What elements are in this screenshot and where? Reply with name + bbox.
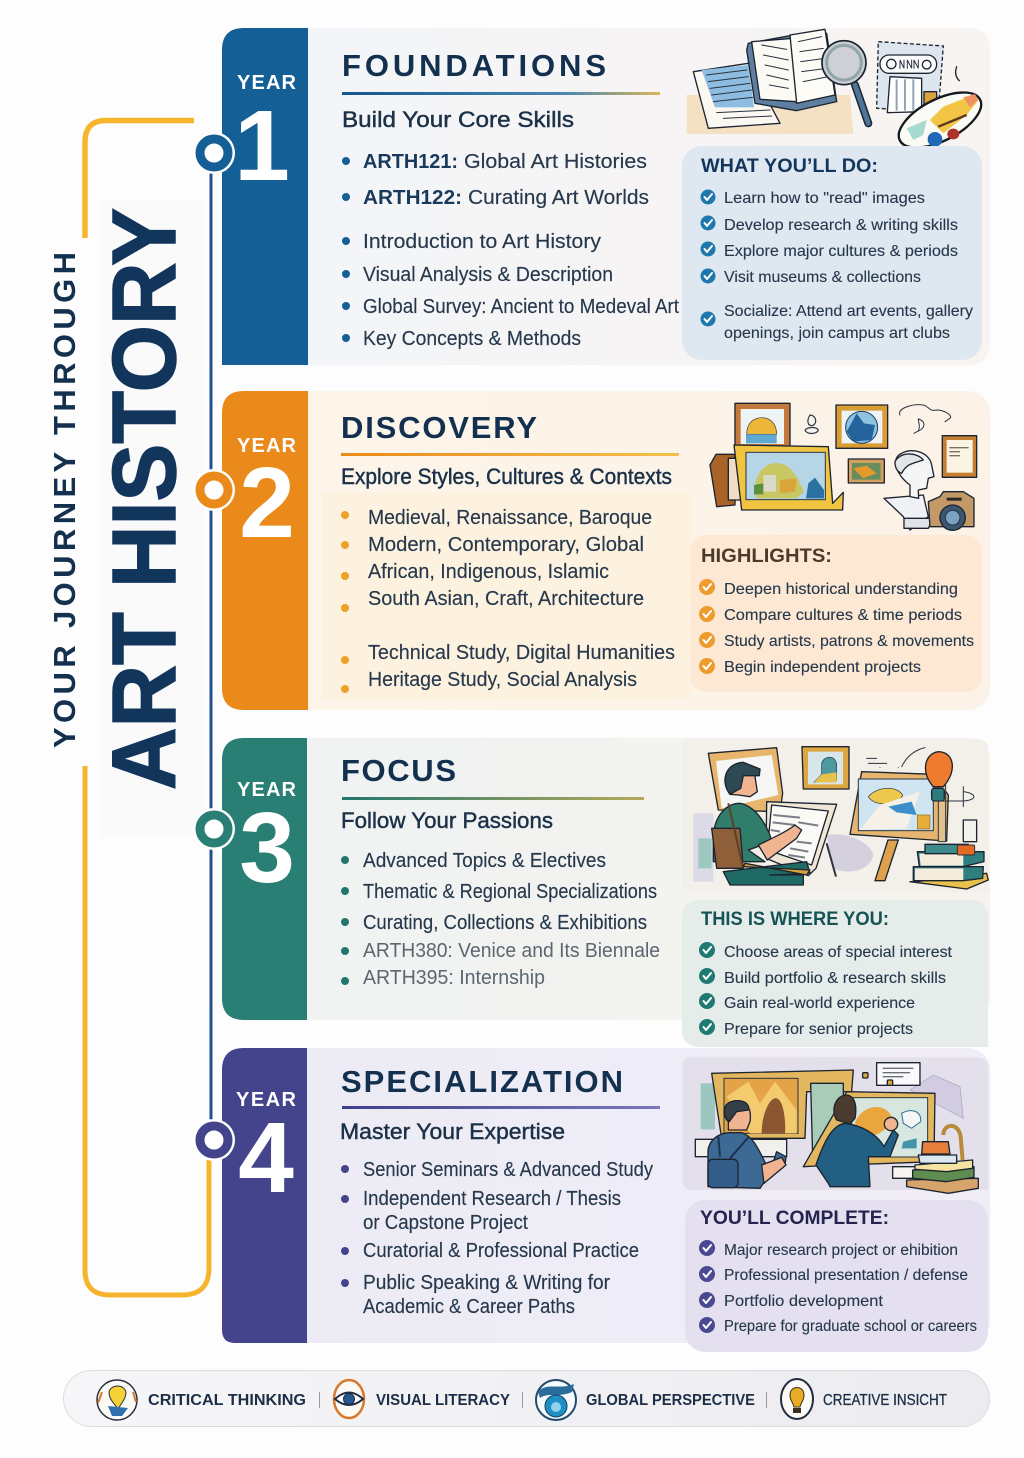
gold bracket top: [85, 120, 194, 238]
heading underline: [342, 797, 644, 800]
card: year 1 foundations: [222, 28, 990, 365]
panel: this is where you: Choose areas of special interest: [724, 944, 953, 961]
subheading: Master Your Expertise: [340, 1119, 565, 1144]
timeline node 1: [193, 132, 235, 174]
year label: YEAR: [237, 72, 297, 94]
topic list: or Capstone Project: [363, 1212, 528, 1234]
card background: [222, 1048, 990, 1343]
course list: [342, 151, 679, 350]
topic list: Academic & Career Paths: [363, 1296, 575, 1318]
heading: SPECIALIZATION: [341, 1064, 623, 1099]
panel: this is where you: Build portfolio & research skills: [724, 970, 946, 987]
heading: FOUNDATIONS: [342, 48, 606, 83]
footer bar: [64, 1370, 990, 1426]
topic list: Public Speaking & Writing for: [363, 1272, 610, 1294]
icon: creative insight: [781, 1379, 813, 1419]
topic list: ARTH395: Internship: [363, 967, 545, 989]
vertical title block: [47, 200, 205, 836]
timeline node 4: [193, 1119, 235, 1161]
year label: 2: [239, 447, 295, 559]
topic list: Independent Research / Thesis: [363, 1188, 621, 1210]
subheading: Follow Your Passions: [341, 808, 553, 833]
topic list: Curating, Collections & Exhibitions: [363, 912, 647, 934]
year label: 4: [238, 1102, 294, 1214]
panel: you'll complete: Major research project or ehibition: [724, 1242, 958, 1259]
card background: [222, 391, 990, 710]
panel: what you'll do: Develop research & writing skills: [724, 217, 958, 234]
card: year 3 focus: [222, 738, 990, 1047]
panel: highlights: HIGHLIGHTS:: [701, 546, 832, 567]
course list: Global Art Histories: [464, 151, 647, 173]
panel: what you'll do: Explore major cultures & periods: [724, 243, 958, 260]
course list: Introduction to Art History: [363, 231, 601, 253]
panel: what you'll do: Socialize: Attend art events, gallery: [724, 303, 973, 320]
panel: highlights: Begin independent projects: [724, 659, 921, 676]
panel: this is where you: Gain real-world experience: [724, 995, 915, 1012]
illustration: student sketching at easel: [682, 739, 988, 892]
panel: what you'll do: openings, join campus art clubs: [724, 325, 950, 342]
panel: what you'll do: [682, 146, 982, 360]
panel: this is where you: [682, 900, 988, 1047]
panel: topics: Medieval, Renaissance, Baroque: [368, 507, 652, 529]
topic list: Senior Seminars & Advanced Study: [363, 1159, 653, 1181]
title: art history: ART HISTORY: [95, 208, 195, 790]
label: global perspective: GLOBAL PERSPECTIVE: [586, 1392, 755, 1409]
panel: topics: [322, 492, 692, 700]
card: year 4 specialization: [222, 1048, 990, 1352]
panel: you'll complete: [685, 1200, 988, 1352]
heading: DISCOVERY: [341, 410, 537, 445]
panel: topics: Modern, Contemporary, Global: [368, 534, 644, 556]
panel: highlights: Deepen historical understanding: [724, 581, 958, 598]
gold bracket bottom: [85, 766, 209, 1295]
year band: [222, 1048, 307, 1343]
panel: you'll complete: Professional presentation / defense: [724, 1267, 968, 1284]
year label: YEAR: [236, 1089, 297, 1111]
year band: [222, 28, 308, 365]
panel: this is where you: Prepare for senior projects: [724, 1021, 913, 1038]
timeline line: [210, 172, 212, 1120]
illustration: students viewing artworks: [683, 1057, 988, 1193]
icon: visual literacy: [334, 1380, 364, 1418]
year label: 1: [234, 90, 290, 202]
subheading: Build Your Core Skills: [342, 107, 574, 132]
label: creative insight: CREATIVE INSICHT: [823, 1392, 947, 1409]
panel: what you'll do: WHAT YOU’LL DO:: [701, 156, 878, 177]
course list: Global Survey: Ancient to Medeval Art: [363, 296, 679, 318]
label: critical thinking: CRITICAL THINKING: [148, 1392, 306, 1409]
topic list: Thematic & Regional Specializations: [363, 881, 657, 903]
topic list: [341, 850, 660, 989]
panel: highlights: Compare cultures & time periods: [724, 607, 962, 624]
course list: ARTH122:: [363, 187, 462, 209]
icon: critical thinking: [97, 1380, 137, 1420]
footer separators: [320, 1392, 766, 1408]
panel: highlights: [690, 535, 982, 692]
panel: topics: South Asian, Craft, Architecture: [368, 588, 644, 610]
card background: [222, 738, 990, 1020]
heading underline: [341, 453, 679, 456]
subheading: Explore Styles, Cultures & Contexts: [341, 464, 672, 489]
course list: ARTH121:: [363, 151, 458, 173]
year band: [222, 391, 308, 710]
panel: you'll complete: YOU’LL COMPLETE:: [700, 1208, 889, 1229]
topic list: ARTH380: Venice and Its Biennale: [363, 940, 660, 962]
panel: this is where you: THIS IS WHERE YOU:: [701, 909, 889, 930]
panel: you'll complete: Portfolio development: [724, 1293, 884, 1310]
topic list: [341, 1159, 653, 1318]
year label: YEAR: [237, 779, 297, 801]
illustration: books, magnifier, column, palette: [687, 29, 989, 159]
course list: Key Concepts & Methods: [363, 328, 581, 350]
panel: topics: Heritage Study, Social Analysis: [368, 669, 637, 691]
topic list: Curatorial & Professional Practice: [363, 1240, 639, 1262]
illustration: gallery wall, bust, camera: [710, 403, 977, 530]
year band: [222, 738, 307, 1020]
panel: topics: African, Indigenous, Islamic: [368, 561, 609, 583]
year label: YEAR: [237, 435, 297, 457]
panel: highlights: Study artists, patrons & movements: [724, 633, 974, 650]
panel: topics: Technical Study, Digital Humanities: [368, 642, 675, 664]
label: visual literacy: VISUAL LITERACY: [376, 1392, 510, 1409]
panel: what you'll do: Learn how to "read" images: [724, 190, 925, 207]
panel: what you'll do: Visit museums & collections: [724, 269, 921, 286]
course list: Visual Analysis & Description: [363, 264, 613, 286]
topic list: Advanced Topics & Electives: [363, 850, 606, 872]
heading underline: [342, 1106, 660, 1109]
panel: you'll complete: Prepare for graduate school or careers: [724, 1318, 977, 1335]
heading: FOCUS: [341, 753, 456, 788]
timeline node 3: [193, 808, 235, 850]
title: your journey through: YOUR JOURNEY THROUGH: [47, 252, 82, 748]
year label: 3: [239, 792, 295, 904]
course list: Curating Art Worlds: [468, 187, 649, 209]
icon: global perspective: [536, 1380, 576, 1420]
timeline node 2: [193, 469, 235, 511]
heading underline: [342, 92, 660, 95]
card background: [222, 28, 990, 365]
card: year 2 discovery: [222, 391, 990, 710]
